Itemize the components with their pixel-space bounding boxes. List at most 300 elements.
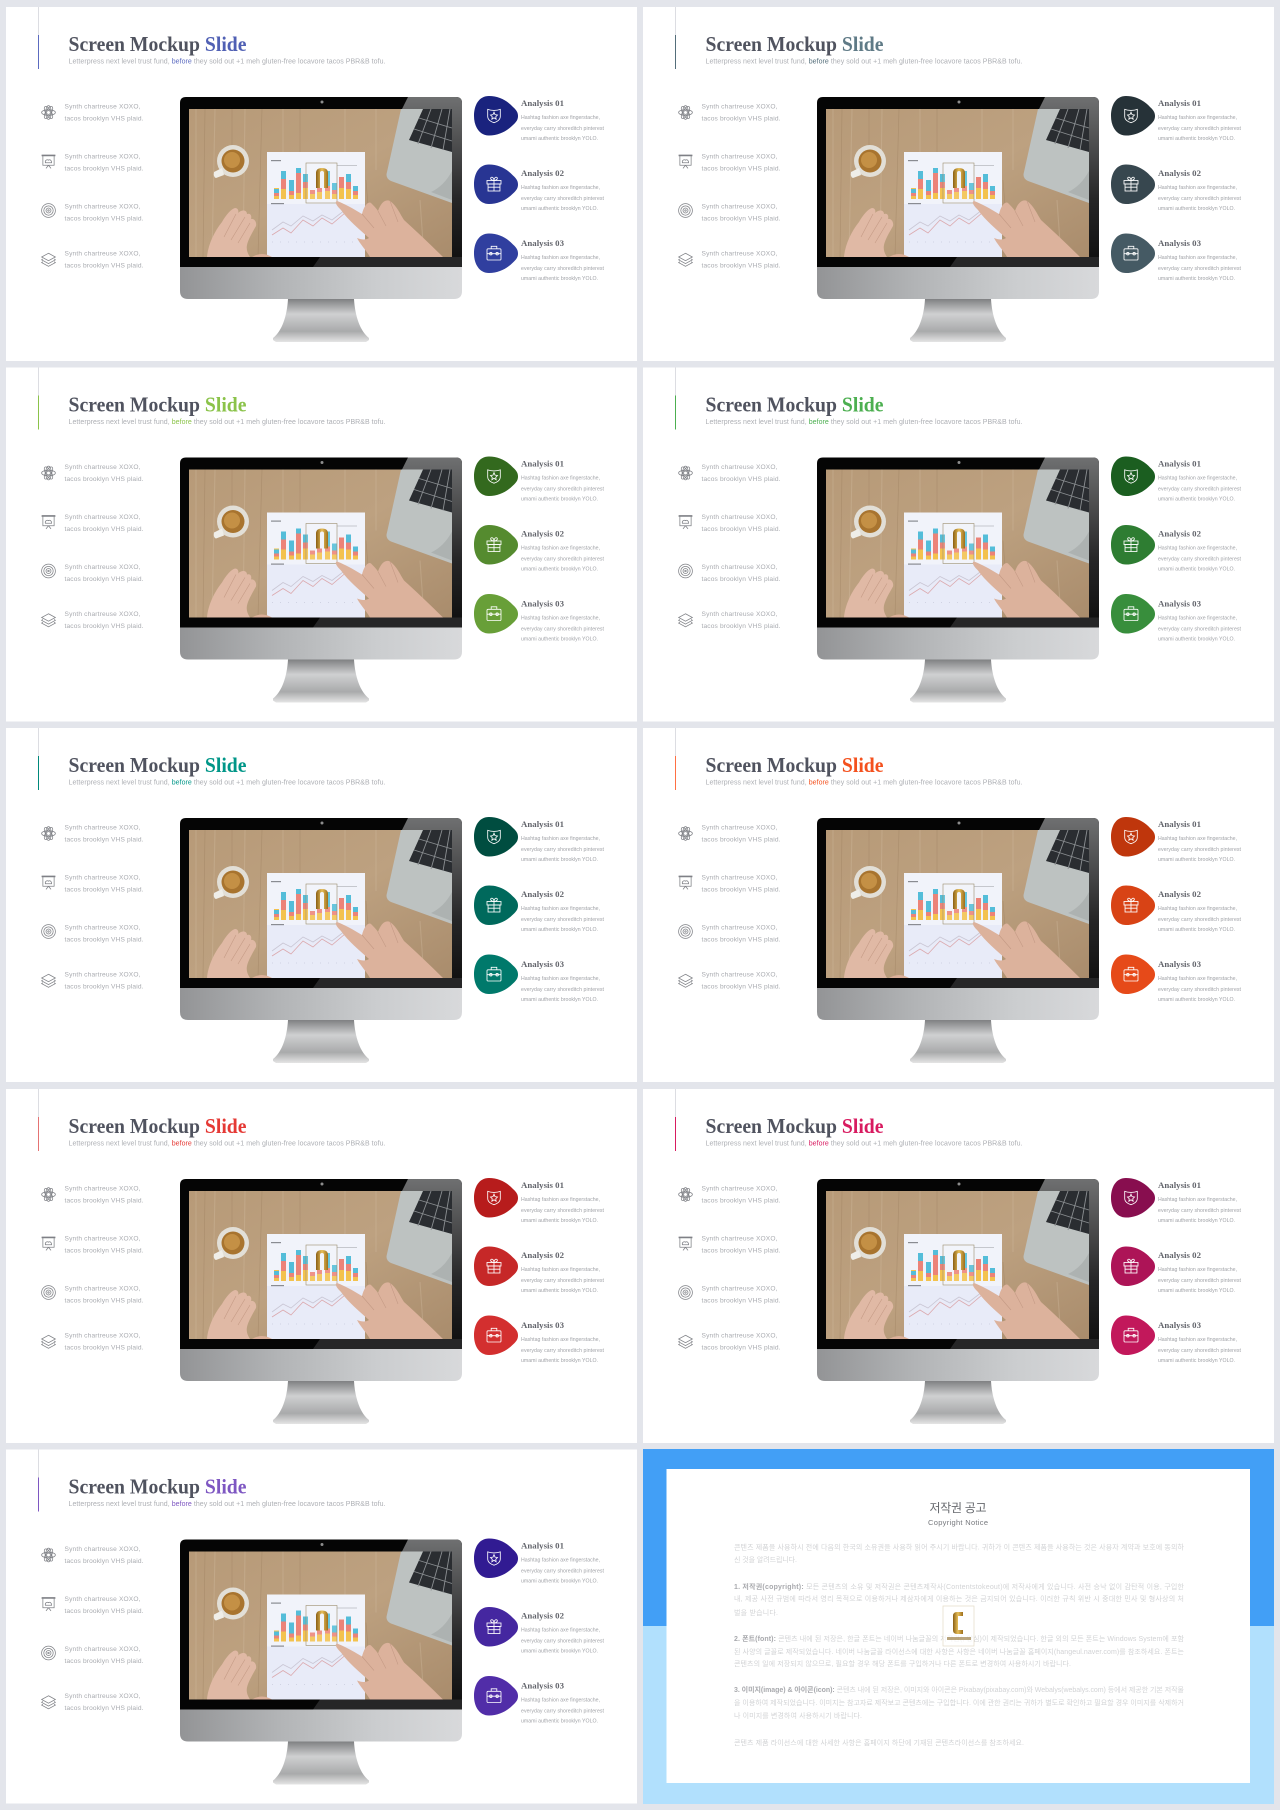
feature text 2: tacos brooklyn VHS plaid.: [64, 526, 144, 533]
analysis 02: Hashtag fashion axe fingerstache,: [1158, 906, 1237, 912]
panel: red slide: [6, 1089, 637, 1443]
analysis 02: [1111, 164, 1242, 212]
feature text 3: [64, 564, 144, 583]
intro paragraph: [734, 1542, 1185, 1564]
analysis 03: Analysis 03: [521, 959, 565, 969]
monitor mockup: [817, 1179, 1099, 1424]
accent line: [38, 728, 39, 790]
analysis 03: everyday carry shoreditch pinterest: [1158, 626, 1242, 632]
analysis 01: Analysis 01: [521, 1540, 564, 1550]
icon: atom: [679, 105, 692, 120]
analysis 02: [474, 164, 605, 212]
icon: atom: [679, 466, 692, 480]
left feature list: [42, 464, 144, 630]
analysis 02: umami authentic brooklyn YOLO.: [521, 927, 598, 933]
icon: layers: [42, 253, 55, 266]
analysis 01: [474, 1538, 605, 1584]
feature text 2: Synth chartreuse XOXO,: [64, 874, 141, 882]
feature text 1: tacos brooklyn VHS plaid.: [702, 116, 781, 122]
analysis 02: everyday carry shoreditch pinterest: [1158, 917, 1242, 923]
analysis 03: [474, 954, 605, 1003]
icon: target: [679, 564, 692, 578]
analysis 02: [474, 525, 605, 572]
left feature list: [42, 104, 144, 270]
feature text 4: Synth chartreuse XOXO,: [64, 250, 141, 258]
analysis 01: everyday carry shoreditch pinterest: [521, 1208, 605, 1214]
left feature list: [42, 1546, 144, 1712]
feature text 3: Synth chartreuse XOXO,: [64, 924, 141, 932]
feature text 3: [702, 924, 781, 944]
feature text 1: [702, 824, 781, 844]
feature text 3: tacos brooklyn VHS plaid.: [64, 1298, 144, 1304]
feature text 2: tacos brooklyn VHS plaid.: [64, 1608, 144, 1615]
feature text 2: Synth chartreuse XOXO,: [702, 874, 778, 882]
feature text 1: [64, 824, 144, 844]
monitor mockup: [180, 818, 462, 1063]
feature text 1: tacos brooklyn VHS plaid.: [64, 836, 144, 844]
icon: presentation board: [679, 516, 692, 529]
analysis 02: everyday carry shoreditch pinterest: [1158, 1278, 1242, 1284]
analysis 02: umami authentic brooklyn YOLO.: [1158, 566, 1235, 572]
analysis 03: [1111, 594, 1242, 642]
icon: target: [42, 1286, 55, 1299]
feature text 4: [64, 1332, 144, 1352]
section 3 image and icon: 3. 이미지(image) & 아이콘(icon): 콘텐츠 내에 된 저장은, 이미지와 아이콘은 Pixabay(pixabay.com)와 Webalys(webalys.com) 등에서 제공한 기본 저작물: [734, 1685, 1185, 1694]
subtitle: Letterpress next level trust fund, before they sold out +1 meh gluten-free locavore tacos PBR&B tofu.: [706, 1140, 1023, 1148]
feature text 4: [64, 1693, 144, 1712]
feature text 4: tacos brooklyn VHS plaid.: [702, 984, 781, 990]
subtitle: Letterpress next level trust fund, before they sold out +1 meh gluten-free locavore tacos PBR&B tofu.: [68, 780, 386, 786]
feature text 2: Synth chartreuse XOXO,: [64, 154, 141, 160]
feature text 4: Synth chartreuse XOXO,: [702, 1332, 778, 1340]
analysis 02: Hashtag fashion axe fingerstache,: [521, 1628, 600, 1634]
icon: presentation board: [42, 876, 55, 889]
analysis 02: [1111, 886, 1242, 933]
analysis 03: umami authentic brooklyn YOLO.: [521, 1358, 598, 1364]
title: Screen Mockup Slide: [68, 1474, 246, 1498]
feature text 4: [702, 611, 781, 630]
analysis 01: Hashtag fashion axe fingerstache,: [521, 1558, 600, 1564]
analysis 03: umami authentic brooklyn YOLO.: [1158, 1358, 1235, 1364]
feature text 1: [702, 1186, 781, 1204]
feature text 1: tacos brooklyn VHS plaid.: [702, 476, 781, 483]
icon: atom: [679, 826, 692, 841]
icon: layers: [42, 974, 55, 987]
analysis 03: Analysis 03: [521, 1680, 565, 1690]
analysis 01: everyday carry shoreditch pinterest: [1158, 847, 1242, 853]
feature text 4: Synth chartreuse XOXO,: [64, 972, 141, 978]
feature text 3: Synth chartreuse XOXO,: [64, 1646, 141, 1653]
left feature list: [679, 824, 781, 990]
panel: orange slide: [643, 728, 1274, 1082]
icon: presentation board: [679, 876, 692, 889]
analysis 02: everyday carry shoreditch pinterest: [521, 917, 605, 923]
analysis 01: Analysis 01: [521, 819, 564, 829]
icon: atom: [42, 826, 55, 841]
feature text 2: Synth chartreuse XOXO,: [64, 1236, 141, 1242]
feature text 1: Synth chartreuse XOXO,: [64, 1186, 141, 1192]
analysis 02: Analysis 02: [521, 1610, 565, 1620]
feature text 4: Synth chartreuse XOXO,: [702, 972, 778, 978]
accent line: [38, 7, 39, 69]
panel: green slide: [643, 368, 1274, 722]
analysis 03: Hashtag fashion axe fingerstache,: [521, 976, 600, 982]
analysis 03: umami authentic brooklyn YOLO.: [1158, 276, 1235, 282]
monitor mockup: [180, 458, 462, 702]
analysis 02: umami authentic brooklyn YOLO.: [521, 566, 598, 572]
analysis 01: umami authentic brooklyn YOLO.: [521, 857, 598, 863]
section 1 copyright: 1. 저작권(copyright): 모든 콘텐츠의 소유 및 저작권은 콘텐츠제작사(Contentstokeout)에 저작사에게 있습니다. 사전 승낙 없이 감탄적 이용, 구입한: [734, 1582, 1185, 1591]
analysis 02: Analysis 02: [521, 168, 565, 178]
left feature list: [679, 1186, 781, 1352]
icon: atom: [42, 1548, 55, 1562]
analysis 01: everyday carry shoreditch pinterest: [521, 847, 605, 853]
analysis 03: everyday carry shoreditch pinterest: [521, 266, 605, 272]
feature text 4: tacos brooklyn VHS plaid.: [64, 984, 144, 990]
feature text 1: Synth chartreuse XOXO,: [64, 464, 141, 471]
feature text 4: [64, 972, 144, 990]
analysis 01: umami authentic brooklyn YOLO.: [1158, 857, 1235, 863]
feature text 3: tacos brooklyn VHS plaid.: [702, 936, 781, 944]
analysis 01: umami authentic brooklyn YOLO.: [521, 136, 598, 142]
icon: target: [679, 1286, 692, 1299]
feature text 3: [64, 1286, 144, 1304]
feature text 4: [702, 250, 781, 270]
icon: layers: [42, 1696, 55, 1709]
monitor mockup: [180, 1540, 462, 1784]
feature text 2: [702, 1236, 781, 1254]
left feature list: [42, 824, 144, 990]
feature text 3: tacos brooklyn VHS plaid.: [64, 936, 144, 944]
analysis 02: everyday carry shoreditch pinterest: [521, 1278, 605, 1284]
icon: presentation board: [42, 516, 55, 529]
feature text 1: tacos brooklyn VHS plaid.: [702, 836, 781, 844]
analysis 01: umami authentic brooklyn YOLO.: [521, 1218, 598, 1224]
title: Screen Mockup Slide: [68, 32, 246, 56]
feature text 4: [64, 250, 144, 270]
feature text 2: [64, 1236, 144, 1254]
panel: purple slide: [6, 1450, 637, 1804]
analysis 01: everyday carry shoreditch pinterest: [1158, 1208, 1242, 1214]
left feature list: [679, 104, 781, 270]
analysis 03: everyday carry shoreditch pinterest: [1158, 987, 1242, 993]
analysis 01: umami authentic brooklyn YOLO.: [1158, 136, 1235, 142]
feature text 1: [702, 104, 781, 122]
analysis 01: Analysis 01: [521, 1180, 564, 1190]
icon: presentation board: [679, 1237, 692, 1250]
analysis 02: Hashtag fashion axe fingerstache,: [521, 546, 600, 552]
title: Screen Mockup Slide: [68, 1114, 246, 1138]
analysis 02: [474, 1607, 605, 1654]
analysis 02: everyday carry shoreditch pinterest: [1158, 556, 1242, 562]
subtitle: Letterpress next level trust fund, before they sold out +1 meh gluten-free locavore tacos PBR&B tofu.: [68, 1501, 386, 1508]
feature text 2: tacos brooklyn VHS plaid.: [64, 166, 144, 172]
analysis 03: Analysis 03: [521, 1320, 565, 1330]
analysis 02: umami authentic brooklyn YOLO.: [1158, 1288, 1235, 1294]
analysis 02: umami authentic brooklyn YOLO.: [1158, 927, 1235, 933]
analysis 01: [474, 456, 605, 502]
left feature list: [42, 1186, 144, 1352]
feature text 1: [64, 104, 144, 122]
feature text 1: tacos brooklyn VHS plaid.: [64, 1198, 144, 1204]
feature text 4: [702, 972, 781, 990]
feature text 4: tacos brooklyn VHS plaid.: [702, 1344, 781, 1352]
analysis 03: everyday carry shoreditch pinterest: [521, 1348, 605, 1354]
feature text 2: [64, 154, 144, 172]
icon: target: [679, 204, 692, 217]
analysis 01: Analysis 01: [521, 98, 564, 108]
analysis 03: umami authentic brooklyn YOLO.: [521, 276, 598, 282]
feature text 3: Synth chartreuse XOXO,: [702, 924, 778, 932]
feature text 3: tacos brooklyn VHS plaid.: [702, 576, 781, 583]
analysis 03: Analysis 03: [1158, 1320, 1202, 1330]
analysis 03: [1111, 1316, 1242, 1364]
feature text 2: [64, 514, 144, 533]
icon: atom: [42, 1187, 55, 1202]
feature text 3: [702, 564, 781, 583]
analysis 01: Hashtag fashion axe fingerstache,: [521, 836, 600, 842]
icon: layers: [42, 614, 55, 627]
feature text 1: [64, 1546, 144, 1565]
feature text 2: tacos brooklyn VHS plaid.: [702, 166, 781, 172]
feature text 3: Synth chartreuse XOXO,: [64, 564, 141, 571]
feature text 2: tacos brooklyn VHS plaid.: [702, 886, 781, 894]
analysis 03: [474, 234, 605, 282]
feature text 2: [64, 1596, 144, 1615]
feature text 3: tacos brooklyn VHS plaid.: [64, 576, 144, 583]
feature text 4: tacos brooklyn VHS plaid.: [702, 262, 781, 270]
analysis 02: Analysis 02: [1158, 1250, 1202, 1260]
feature text 3: [64, 1646, 144, 1665]
analysis 01: Analysis 01: [1158, 98, 1201, 108]
analysis 02: everyday carry shoreditch pinterest: [521, 556, 605, 562]
icon: layers: [42, 1335, 55, 1348]
analysis 01: everyday carry shoreditch pinterest: [1158, 126, 1242, 132]
feature text 1: tacos brooklyn VHS plaid.: [64, 116, 144, 122]
title: Screen Mockup Slide: [706, 32, 884, 56]
feature text 4: Synth chartreuse XOXO,: [702, 250, 778, 258]
icon: atom: [42, 105, 55, 120]
analysis 02: [1111, 525, 1242, 572]
analysis 03: umami authentic brooklyn YOLO.: [1158, 997, 1235, 1003]
icon: atom: [679, 1187, 692, 1202]
analysis 03: Hashtag fashion axe fingerstache,: [1158, 616, 1237, 622]
analysis 02: everyday carry shoreditch pinterest: [521, 196, 605, 202]
analysis 02: everyday carry shoreditch pinterest: [521, 1638, 605, 1644]
monitor mockup: [180, 97, 462, 342]
analysis 01: everyday carry shoreditch pinterest: [521, 126, 605, 132]
copyright subheading: Copyright Notice: [928, 1518, 988, 1527]
accent line: [675, 368, 676, 430]
feature text 3: Synth chartreuse XOXO,: [64, 204, 141, 210]
feature text 4: [64, 611, 144, 630]
panel: light green slide: [6, 368, 637, 722]
analysis 01: Hashtag fashion axe fingerstache,: [521, 1197, 600, 1203]
feature text 2: Synth chartreuse XOXO,: [64, 1596, 141, 1603]
icon: target: [42, 564, 55, 578]
section 2 font: 2. 폰트(font): 콘텐츠 내에 된 저장은, 한글 폰트는 네이버 나눔글꼴의 저작권(, 양심)이 제작되었습니다. 한글 외의 모든 폰트는 Windows System에 포함: [734, 1634, 1185, 1643]
analysis 03: Analysis 03: [1158, 959, 1202, 969]
analysis 03: [1111, 954, 1242, 1003]
analysis 03: Hashtag fashion axe fingerstache,: [1158, 255, 1237, 261]
analysis 02: everyday carry shoreditch pinterest: [1158, 196, 1242, 202]
panel: copyright notice: [643, 1449, 1274, 1804]
analysis 03: everyday carry shoreditch pinterest: [1158, 1348, 1242, 1354]
section 2 font: 된 사양의 글꼴로 제작되었습니다. 네이버 나눔글꼴 라이선스에 대한 사항은 사항은 네이버 나눔글꼴 홈페이지(hangeul.naver.com)를 참조하세요. 폰트는: [734, 1647, 1185, 1656]
analysis 02: Analysis 02: [1158, 528, 1202, 538]
feature text 4: tacos brooklyn VHS plaid.: [64, 1344, 144, 1352]
icon: layers: [679, 1335, 692, 1348]
monitor mockup: [817, 818, 1099, 1063]
analysis 01: everyday carry shoreditch pinterest: [1158, 486, 1242, 492]
icon: presentation board: [42, 155, 55, 168]
feature text 1: Synth chartreuse XOXO,: [64, 824, 141, 832]
analysis 03: Analysis 03: [1158, 598, 1202, 608]
feature text 2: Synth chartreuse XOXO,: [64, 514, 141, 521]
title: Screen Mockup Slide: [68, 753, 246, 777]
analysis 02: Hashtag fashion axe fingerstache,: [521, 1267, 600, 1273]
analysis 02: umami authentic brooklyn YOLO.: [521, 1648, 598, 1654]
left feature list: [679, 464, 781, 630]
feature text 4: Synth chartreuse XOXO,: [702, 611, 778, 618]
analysis 01: [1111, 456, 1242, 502]
feature text 4: Synth chartreuse XOXO,: [64, 611, 141, 618]
analysis 03: Hashtag fashion axe fingerstache,: [521, 1337, 600, 1343]
icon: layers: [679, 253, 692, 266]
subtitle: Letterpress next level trust fund, before they sold out +1 meh gluten-free locavore tacos PBR&B tofu.: [706, 58, 1023, 66]
analysis 02: Analysis 02: [1158, 889, 1202, 899]
feature text 1: [64, 464, 144, 483]
analysis 01: Hashtag fashion axe fingerstache,: [1158, 836, 1237, 842]
analysis 03: Hashtag fashion axe fingerstache,: [521, 255, 600, 261]
feature text 1: Synth chartreuse XOXO,: [702, 1186, 778, 1192]
panel: pink slide: [643, 1089, 1274, 1443]
feature text 4: tacos brooklyn VHS plaid.: [64, 262, 144, 270]
section 3 image and icon: 을 이용하여 제작되었습니다. 이미지는 참고자료 제작보고 콘텐츠에는 구입합니다. 이에 관한 권리는 귀하가 별도로 확인하고 필요할 경우 이미지를 삭제하거: [734, 1698, 1184, 1707]
feature text 4: Synth chartreuse XOXO,: [64, 1332, 141, 1340]
analysis 01: Hashtag fashion axe fingerstache,: [1158, 115, 1237, 121]
analysis 02: Analysis 02: [521, 889, 565, 899]
copyright heading: 저작권 공고: [930, 1501, 986, 1515]
panel: blue slide: [6, 7, 637, 361]
analysis 03: Hashtag fashion axe fingerstache,: [521, 616, 600, 622]
icon: atom: [42, 466, 55, 480]
analysis 02: umami authentic brooklyn YOLO.: [521, 1288, 598, 1294]
analysis 02: [474, 1246, 605, 1294]
section 1 copyright: [734, 1582, 1185, 1617]
feature text 3: Synth chartreuse XOXO,: [702, 1286, 778, 1292]
feature text 4: tacos brooklyn VHS plaid.: [702, 623, 781, 630]
analysis 03: Analysis 03: [521, 598, 565, 608]
subtitle: Letterpress next level trust fund, before they sold out +1 meh gluten-free locavore tacos PBR&B tofu.: [706, 780, 1023, 786]
feature text 2: [702, 514, 781, 533]
feature text 1: [702, 464, 781, 483]
section 3 image and icon: [734, 1685, 1185, 1720]
icon: presentation board: [42, 1237, 55, 1250]
feature text 1: Synth chartreuse XOXO,: [64, 1546, 141, 1553]
feature text 2: tacos brooklyn VHS plaid.: [702, 1248, 781, 1254]
title: Screen Mockup Slide: [706, 1114, 884, 1138]
intro paragraph: 신 것을 알려드립니다.: [734, 1555, 797, 1564]
analysis 03: Analysis 03: [521, 238, 565, 248]
feature text 3: [702, 204, 781, 222]
feature text 1: Synth chartreuse XOXO,: [64, 104, 141, 110]
analysis 01: [1111, 96, 1242, 142]
feature text 3: [702, 1286, 781, 1304]
feature text 3: Synth chartreuse XOXO,: [702, 564, 778, 571]
feature text 4: tacos brooklyn VHS plaid.: [64, 1705, 144, 1712]
analysis 03: umami authentic brooklyn YOLO.: [521, 1718, 598, 1724]
analysis 01: umami authentic brooklyn YOLO.: [521, 496, 598, 502]
section 3 image and icon: 나 이미지를 변경하여 사용하시기 바랍니다.: [734, 1711, 862, 1720]
analysis 03: [1111, 234, 1242, 282]
analysis 01: Analysis 01: [1158, 458, 1201, 468]
icon: layers: [679, 614, 692, 627]
analysis 03: Hashtag fashion axe fingerstache,: [1158, 1337, 1237, 1343]
feature text 1: [64, 1186, 144, 1204]
section 2 font: 콘텐츠의 일에 저장되지 않으므로, 필요할 경우 해당 폰트를 구입하거나 다른 폰트로 변경하여 사용하시기 바랍니다.: [734, 1659, 1071, 1668]
analysis 03: umami authentic brooklyn YOLO.: [1158, 636, 1235, 642]
accent line: [38, 368, 39, 430]
analysis 03: everyday carry shoreditch pinterest: [1158, 266, 1242, 272]
section 1 copyright: 벌을 받습니다.: [734, 1608, 778, 1617]
subtitle: Letterpress next level trust fund, before they sold out +1 meh gluten-free locavore tacos PBR&B tofu.: [68, 1140, 386, 1148]
monitor mockup: [817, 458, 1099, 702]
analysis 02: Hashtag fashion axe fingerstache,: [521, 906, 600, 912]
feature text 3: tacos brooklyn VHS plaid.: [702, 1298, 781, 1304]
analysis 01: everyday carry shoreditch pinterest: [521, 1568, 605, 1574]
feature text 3: Synth chartreuse XOXO,: [64, 1286, 141, 1292]
analysis 02: [474, 886, 605, 933]
analysis 01: Hashtag fashion axe fingerstache,: [521, 476, 600, 482]
analysis 03: everyday carry shoreditch pinterest: [521, 987, 605, 993]
accent line: [675, 1089, 676, 1151]
feature text 1: tacos brooklyn VHS plaid.: [64, 1558, 144, 1565]
feature text 2: tacos brooklyn VHS plaid.: [64, 886, 144, 894]
analysis 03: Hashtag fashion axe fingerstache,: [1158, 976, 1237, 982]
analysis 02: Hashtag fashion axe fingerstache,: [1158, 1267, 1237, 1273]
analysis 02: [1111, 1246, 1242, 1294]
analysis 02: Hashtag fashion axe fingerstache,: [1158, 185, 1237, 191]
analysis 03: [474, 594, 605, 642]
closing line: 콘텐츠 제품 라이선스에 대한 사세한 사항은 홈페이지 하단에 기재된 콘텐츠라이선스를 참조하세요.: [734, 1738, 1024, 1747]
feature text 4: Synth chartreuse XOXO,: [64, 1693, 141, 1700]
analysis 01: Analysis 01: [1158, 1180, 1201, 1190]
feature text 2: [702, 154, 781, 172]
analysis 03: Analysis 03: [1158, 238, 1202, 248]
feature text 2: [64, 874, 144, 894]
feature text 4: [702, 1332, 781, 1352]
accent line: [675, 728, 676, 790]
subtitle: Letterpress next level trust fund, before they sold out +1 meh gluten-free locavore tacos PBR&B tofu.: [68, 419, 386, 426]
logo: watermark C: [943, 1606, 974, 1646]
monitor mockup: [180, 1179, 462, 1424]
title: Screen Mockup Slide: [706, 753, 884, 777]
analysis 03: everyday carry shoreditch pinterest: [521, 1708, 605, 1714]
panel: blue grey slide: [643, 7, 1274, 361]
analysis 02: Hashtag fashion axe fingerstache,: [1158, 546, 1237, 552]
icon: target: [679, 925, 692, 938]
section 2 font: [734, 1634, 1185, 1668]
feature text 2: tacos brooklyn VHS plaid.: [64, 1248, 144, 1254]
analysis 01: [474, 1178, 605, 1224]
monitor mockup: [817, 97, 1099, 342]
analysis 01: umami authentic brooklyn YOLO.: [1158, 1218, 1235, 1224]
analysis 02: umami authentic brooklyn YOLO.: [521, 206, 598, 212]
analysis 01: [1111, 817, 1242, 863]
feature text 2: Synth chartreuse XOXO,: [702, 514, 778, 521]
subtitle: Letterpress next level trust fund, before they sold out +1 meh gluten-free locavore tacos PBR&B tofu.: [68, 58, 386, 66]
